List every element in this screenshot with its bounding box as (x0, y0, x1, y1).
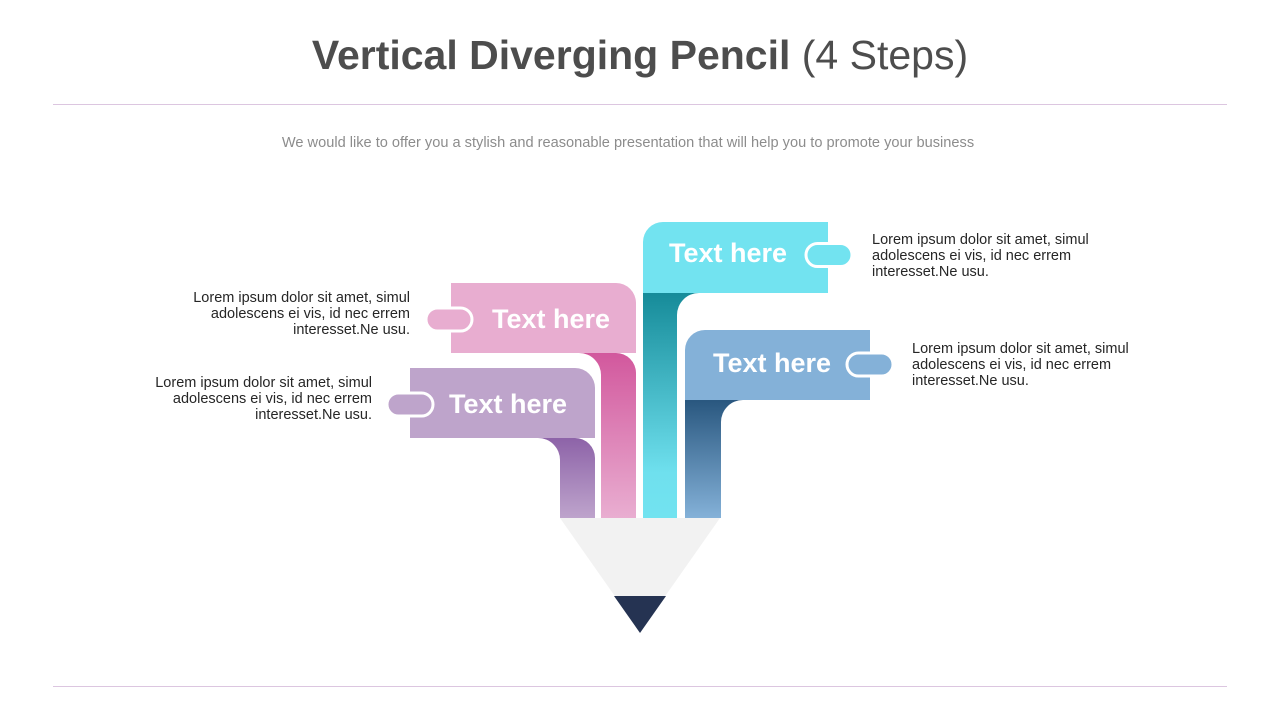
text block: purple: interesset.Ne usu. (255, 407, 372, 423)
text block: blue: interesset.Ne usu. (912, 373, 1029, 389)
band: cyan (643, 222, 900, 530)
text block: blue: adolescens ei vis, id nec errem (912, 357, 1111, 373)
subtitle: We would like to offer you a stylish and reasonable presentation that will help you to promote your business (282, 135, 974, 151)
title: Vertical Diverging Pencil (4 Steps) (312, 32, 968, 78)
band: pink: Text here (492, 304, 610, 334)
text block: cyan: Lorem ipsum dolor sit amet, simul (872, 232, 1089, 248)
band: pink (380, 283, 636, 530)
band: purple (380, 368, 595, 530)
band: purple: Text here (449, 389, 567, 419)
text block: pink: interesset.Ne usu. (293, 322, 410, 338)
text block: pink: adolescens ei vis, id nec errem (211, 306, 410, 322)
text block: cyan: interesset.Ne usu. (872, 264, 989, 280)
text block: purple: adolescens ei vis, id nec errem (173, 391, 372, 407)
tab (426, 308, 472, 331)
text block: cyan: adolescens ei vis, id nec errem (872, 248, 1071, 264)
tab (387, 393, 433, 416)
band: blue (685, 330, 900, 530)
tab (806, 244, 852, 266)
text block: purple: Lorem ipsum dolor sit amet, simul (155, 375, 372, 391)
pencil tip (560, 518, 720, 633)
band: blue: Text here (713, 348, 831, 378)
pencil lead (614, 596, 666, 633)
tab (847, 353, 893, 376)
text block: blue: Lorem ipsum dolor sit amet, simul (912, 341, 1129, 357)
band: cyan: Text here (669, 238, 787, 268)
text block: pink: Lorem ipsum dolor sit amet, simul (193, 290, 410, 306)
